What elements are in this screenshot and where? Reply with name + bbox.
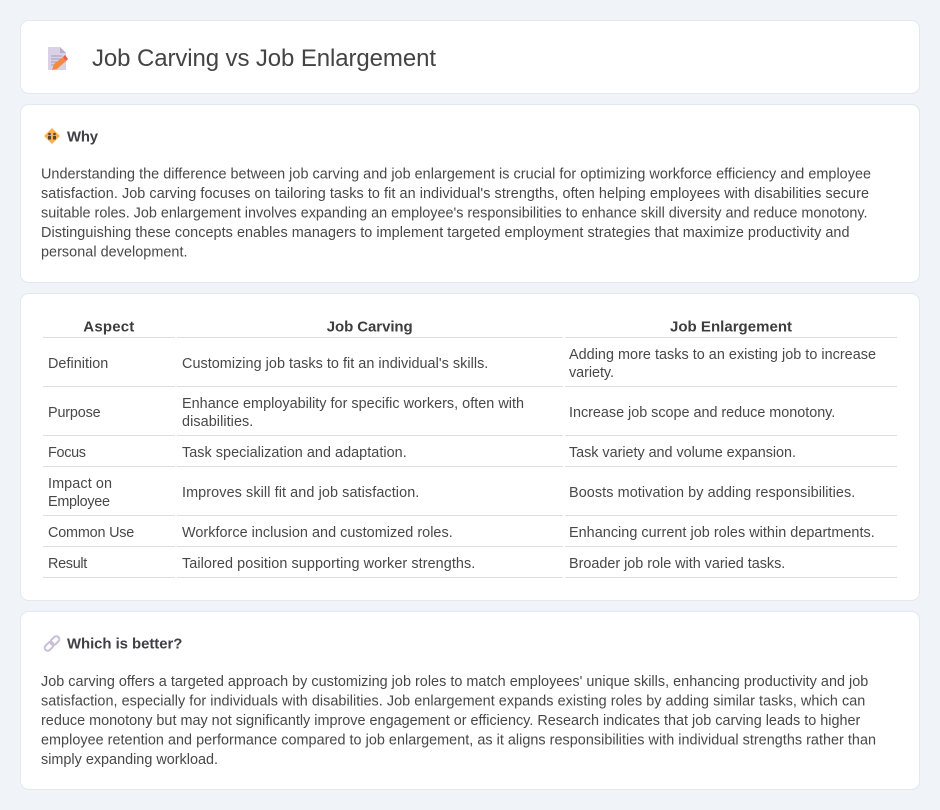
- panel: which is better: [20, 612, 920, 790]
- row: definition: [48, 347, 876, 381]
- panel: why: [20, 104, 920, 282]
- row: common use: [48, 525, 875, 541]
- row: focus: Task variety and volume expansion.: [569, 445, 796, 461]
- table header: [83, 318, 792, 336]
- row: purpose: Increase job scope and reduce monotony.: [569, 405, 835, 421]
- text block: why: suitable roles. Job enlargement involves expanding an employee's responsibilities to enhance skill diversity and reduce monotony.: [41, 206, 868, 222]
- row: focus: Focus: [48, 445, 86, 461]
- text block: why: Understanding the difference between job carving and job enlargement is crucial for optimizing workforce efficiency and employee: [41, 166, 871, 182]
- row: definition: Definition: [48, 356, 108, 372]
- row: common use: Workforce inclusion and customized roles.: [182, 525, 453, 541]
- table header: Job Carving: [327, 318, 413, 336]
- text block: which is better: satisfaction, especially for individuals with disabilities. Job enlargement expands existing roles by adding similar tasks, which can: [41, 694, 865, 710]
- row: result: Result: [48, 556, 87, 572]
- text block: why: satisfaction. Job carving focuses on tailoring tasks to fit an individual's strengths, often helping employees with disabilities secure: [41, 186, 869, 202]
- row: definition: Adding more tasks to an existing job to increase: [569, 347, 876, 363]
- row: impact on employee: Improves skill fit and job satisfaction.: [182, 485, 419, 501]
- row: impact on employee: Boosts motivation by adding responsibilities.: [569, 485, 855, 501]
- title: Job Carving vs Job Enlargement: [92, 45, 436, 72]
- text block: which is better: simply expanding workload.: [41, 752, 218, 768]
- text block: which is better: employee retention and performance compared to job enlargement, as it aligns responsibilities with individual strengths rather than: [41, 732, 876, 748]
- row: impact on employee: Employee: [48, 494, 110, 510]
- row: purpose: [48, 396, 835, 430]
- icon: warning diamond: [44, 128, 60, 144]
- panel: comparison table: [20, 294, 920, 600]
- row: result: Broader job role with varied tasks.: [569, 556, 785, 572]
- table header: Aspect: [83, 318, 134, 336]
- row: focus: [48, 445, 796, 461]
- text block: which is better: Job carving offers a targeted approach by customizing job roles to match employees' unique skills, enhancing productivity and job: [41, 674, 868, 690]
- row: definition: variety.: [569, 365, 614, 381]
- row: impact on employee: Impact on: [48, 476, 112, 492]
- heading: which is better: Which is better?: [67, 636, 182, 652]
- heading: why: Why: [67, 130, 99, 146]
- icon: document with pencil: [48, 47, 68, 70]
- row: result: [48, 556, 785, 572]
- row: focus: Task specialization and adaptation.: [182, 445, 407, 461]
- icon: link: [44, 635, 60, 652]
- row: definition: Customizing job tasks to fit an individual's skills.: [182, 356, 488, 372]
- text block: why: [41, 166, 871, 260]
- row: impact on employee: [48, 476, 855, 510]
- panel: title header: [20, 20, 920, 94]
- text block: why: Distinguishing these concepts enables managers to implement targeted employment strategies that maximize productivity and: [41, 225, 850, 241]
- row: common use: Common Use: [48, 525, 134, 541]
- row: common use: Enhancing current job roles within departments.: [569, 525, 875, 541]
- text block: which is better: reduce monotony but may not significantly improve engagement or efficiency. Research indicates that job carving leads to higher: [41, 713, 861, 729]
- text block: which is better: [41, 674, 876, 768]
- row: purpose: disabilities.: [182, 414, 253, 430]
- row: result: Tailored position supporting worker strengths.: [182, 556, 475, 572]
- text block: why: personal development.: [41, 244, 188, 260]
- row: purpose: Purpose: [48, 405, 101, 421]
- table header: Job Enlargement: [670, 318, 792, 336]
- row: purpose: Enhance employability for specific workers, often with: [182, 396, 524, 412]
